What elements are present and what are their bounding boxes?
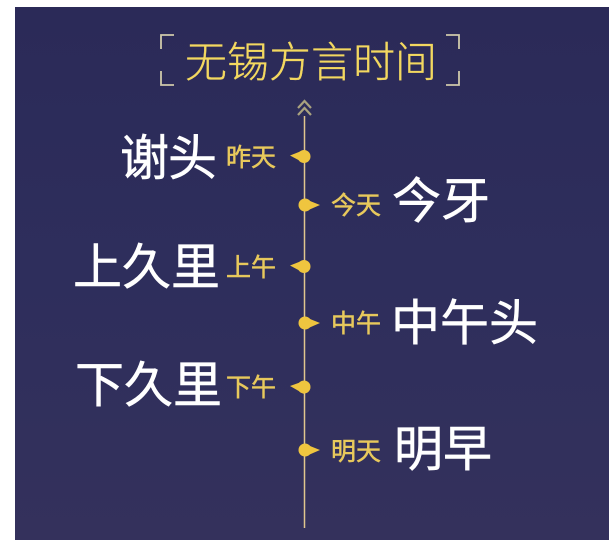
entry: 下午 下久里 [75, 359, 310, 413]
marker [298, 316, 320, 330]
entry: 上午 上久里 [73, 241, 310, 295]
entry: 今天 今牙: 今天 [331, 192, 381, 220]
entry: 昨天 谢头 [120, 132, 310, 186]
entry: 上午 上久里: 上久里 [73, 241, 220, 295]
timeline axis [298, 101, 311, 528]
entry: 今天 今牙: 今牙 [392, 175, 490, 229]
entry: 中午 中午头 [298, 297, 538, 351]
entry: 下午 下久里: 下久里 [75, 359, 222, 413]
marker [290, 380, 310, 394]
icon: double arrow [298, 101, 311, 115]
entry: 明天 明早: 明天 [331, 438, 381, 466]
marker [298, 444, 320, 456]
title text: 无锡方言时间 [185, 39, 437, 86]
title [161, 35, 459, 86]
marker [298, 198, 320, 212]
entry: 明天 明早: 明早 [394, 423, 492, 477]
entry: 下午 下久里: 下午 [226, 374, 276, 402]
entry: 昨天 谢头: 谢头 [120, 132, 217, 186]
marker [290, 260, 310, 273]
entry: 中午 中午头: 中午 [331, 310, 381, 338]
marker [290, 150, 310, 163]
entry: 上午 上久里: 上午 [226, 254, 276, 282]
entry: 明天 明早 [298, 423, 492, 477]
title brackets [161, 35, 459, 85]
entry: 昨天 谢头: 昨天 [226, 144, 276, 172]
entry: 中午 中午头: 中午头 [391, 297, 538, 351]
entry: 今天 今牙 [298, 175, 490, 229]
